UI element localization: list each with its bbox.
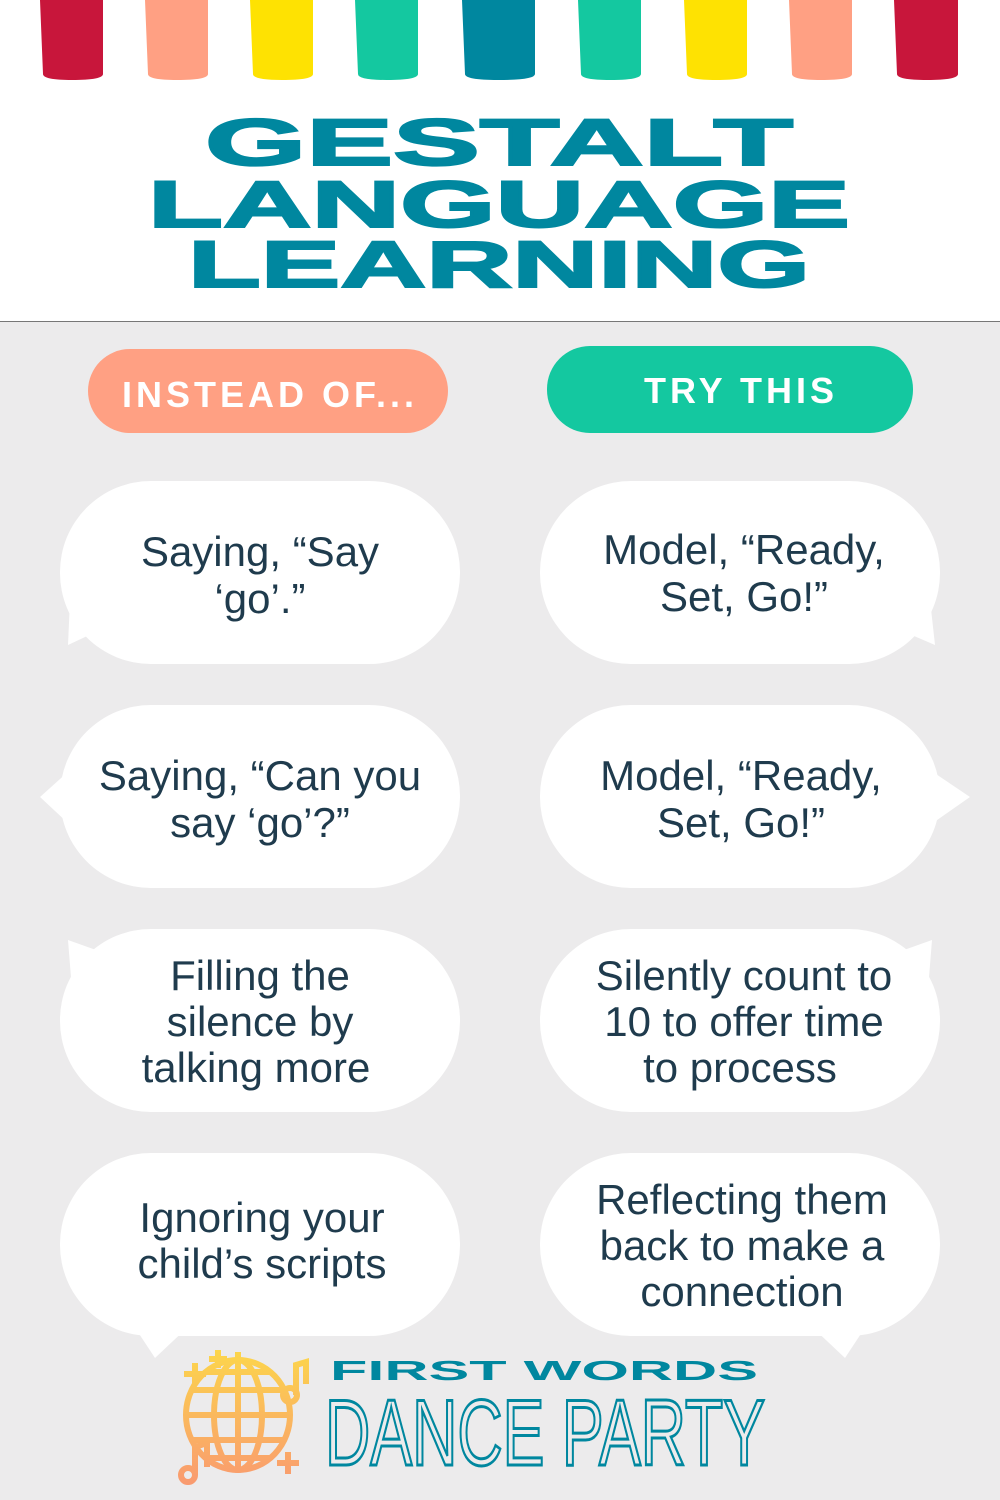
cups row (40, 0, 958, 80)
bubble: say go: ‘go’.” (214, 575, 306, 622)
bubble: model ready set go 1: Set, Go!” (660, 573, 828, 620)
bubble: reflecting: connection (640, 1268, 844, 1315)
bubble: say go (60, 481, 460, 664)
bubble: ignoring scripts (60, 1153, 460, 1358)
bubble: say go: Saying, “Say (141, 528, 379, 575)
title: GESTALT (205, 105, 793, 179)
background panel (0, 321, 1000, 1500)
header: instead of (88, 349, 448, 433)
icon: disco ball (181, 1350, 306, 1482)
logo text: FIRST WORDS (330, 1355, 758, 1386)
bubble: ignoring scripts: Ignoring your (139, 1194, 385, 1241)
header: try this (547, 346, 913, 433)
bubble: model ready set go 2 (540, 705, 970, 888)
bubble: ignoring scripts: child’s scripts (138, 1240, 386, 1287)
bubble: model ready set go 2: Model, “Ready, (600, 752, 882, 799)
bubble: silently count: 10 to offer time (604, 998, 884, 1045)
bubble: silently count: Silently count to (596, 952, 892, 999)
bubble: model ready set go 2: Set, Go!” (657, 799, 825, 846)
bubble: reflecting: Reflecting them (596, 1176, 888, 1223)
bubbles (40, 481, 970, 1358)
logo: DANCE PARTY (325, 1380, 765, 1485)
bubble: filling the silence: silence by (167, 998, 353, 1045)
bubble: can you say go: Saying, “Can you (99, 752, 421, 799)
bubble: filling the silence (60, 929, 460, 1112)
title: LANGUAGE (148, 167, 850, 241)
bubble: can you say go: say ‘go’?” (170, 799, 350, 846)
title: LEARNING (188, 227, 810, 301)
logo (181, 1350, 765, 1485)
header: try this: TRY THIS (644, 370, 838, 411)
bubble: reflecting: back to make a (600, 1222, 885, 1269)
title (148, 105, 850, 301)
bubble: model ready set go 1: Model, “Ready, (603, 526, 885, 573)
bubble: silently count (540, 929, 940, 1112)
bubble: reflecting (540, 1153, 940, 1358)
bubble: silently count: to process (643, 1044, 837, 1091)
bubble: model ready set go 1 (540, 481, 940, 664)
bubble: filling the silence: talking more (142, 1044, 370, 1091)
bubble: filling the silence: Filling the (170, 952, 350, 999)
bubble: can you say go (40, 705, 460, 888)
header: instead of: INSTEAD OF... (122, 374, 418, 415)
